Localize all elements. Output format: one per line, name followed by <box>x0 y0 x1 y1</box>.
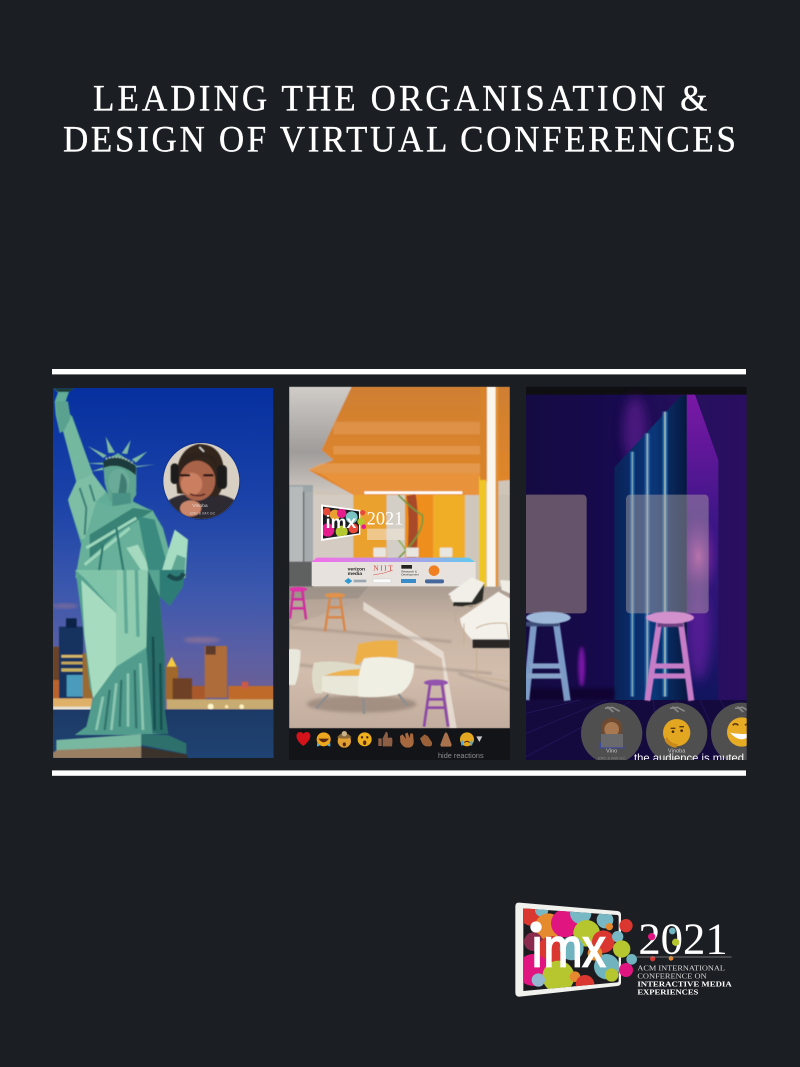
statue upper body <box>53 388 188 578</box>
reception desk with sponsor logos <box>312 558 476 586</box>
title: DESIGN OF VIRTUAL CONFERENCES <box>63 119 736 160</box>
reception desk with sponsor logos: NIIT <box>373 564 393 573</box>
reception desk with sponsor logos: Development <box>401 572 419 576</box>
left translucent screen <box>520 495 587 613</box>
bottom white rule <box>52 770 746 776</box>
title <box>63 78 736 160</box>
icon: crying face <box>460 732 474 746</box>
speaker avatar <box>162 442 240 523</box>
IMX logo on wall: 2021 <box>367 509 403 530</box>
logo conference name: EXPERIENCES <box>637 988 698 997</box>
icon: clapping hands <box>420 734 432 746</box>
speaker avatar: Vinoba <box>192 503 208 509</box>
left chair fragment <box>288 649 301 685</box>
photo panel: neon stage with audience <box>526 386 747 760</box>
IMX logo on wall: imx <box>326 512 356 532</box>
icon: exploding head <box>337 731 352 748</box>
photo panel: Statue of Liberty with speaker avatar <box>52 388 273 758</box>
icon: heart <box>296 732 310 746</box>
logo wordmark imx: ımx <box>531 917 606 979</box>
reception desk with sponsor logos: verizon <box>348 567 365 573</box>
audience avatar: grinning <box>711 702 747 760</box>
icon: waving hand <box>400 733 414 748</box>
pink stool <box>646 612 694 701</box>
orange stool <box>325 593 345 631</box>
top white rule <box>52 369 746 374</box>
reactions bar <box>296 731 484 760</box>
icon: praying hands <box>440 732 452 747</box>
audience avatar: Vinoba <box>646 703 707 764</box>
far right chair <box>500 580 510 593</box>
IMX 2021 logo <box>515 903 733 997</box>
logo year 2021: 2021 <box>638 913 728 963</box>
blue stool <box>526 612 571 701</box>
neon pillar <box>614 395 719 700</box>
purple stool <box>424 680 448 727</box>
photo panel: virtual lobby with reactions bar <box>288 387 510 760</box>
IMX logo on wall <box>321 504 404 541</box>
statue lower body <box>75 570 185 735</box>
logo conference name: INTERACTIVE MEDIA <box>637 980 733 989</box>
city skyline <box>53 618 273 710</box>
logo frame with coloured dots <box>515 903 637 997</box>
audience avatar: Vino: Vino <box>606 748 617 754</box>
statue <box>53 388 188 758</box>
audience avatar: Vinoba: Vinoba <box>668 748 686 754</box>
far bench <box>448 577 486 623</box>
logo conference name: ACM INTERNATIONAL <box>637 963 726 972</box>
near bench <box>460 592 510 682</box>
icon: laughing face <box>317 732 331 747</box>
speaker avatar: ERC & IMX GC <box>190 512 216 516</box>
label: the audience is muted: the audience is muted <box>634 753 744 765</box>
title: LEADING THE ORGANISATION & <box>93 78 708 119</box>
audience avatar: Vino: ERC & IMX GC <box>598 756 626 761</box>
audience avatar: Vino <box>581 703 642 764</box>
reception desk with sponsor logos: media <box>348 571 362 577</box>
label: hide reactions: hide reactions <box>438 751 484 760</box>
armchair <box>307 640 417 714</box>
magenta stool <box>289 587 307 619</box>
reception desk with sponsor logos: Research & <box>401 569 417 573</box>
logo conference name: CONFERENCE ON <box>637 971 707 980</box>
icon: astonished face <box>358 732 372 746</box>
water <box>53 710 273 758</box>
logo conference name <box>637 963 733 997</box>
pedestal <box>53 734 188 758</box>
lobby room <box>289 387 510 728</box>
icon: expand triangle <box>476 736 482 742</box>
right translucent screen <box>626 495 709 613</box>
stools and chairs <box>288 577 510 727</box>
floor <box>526 688 747 760</box>
icon: thumbs up <box>378 732 392 746</box>
